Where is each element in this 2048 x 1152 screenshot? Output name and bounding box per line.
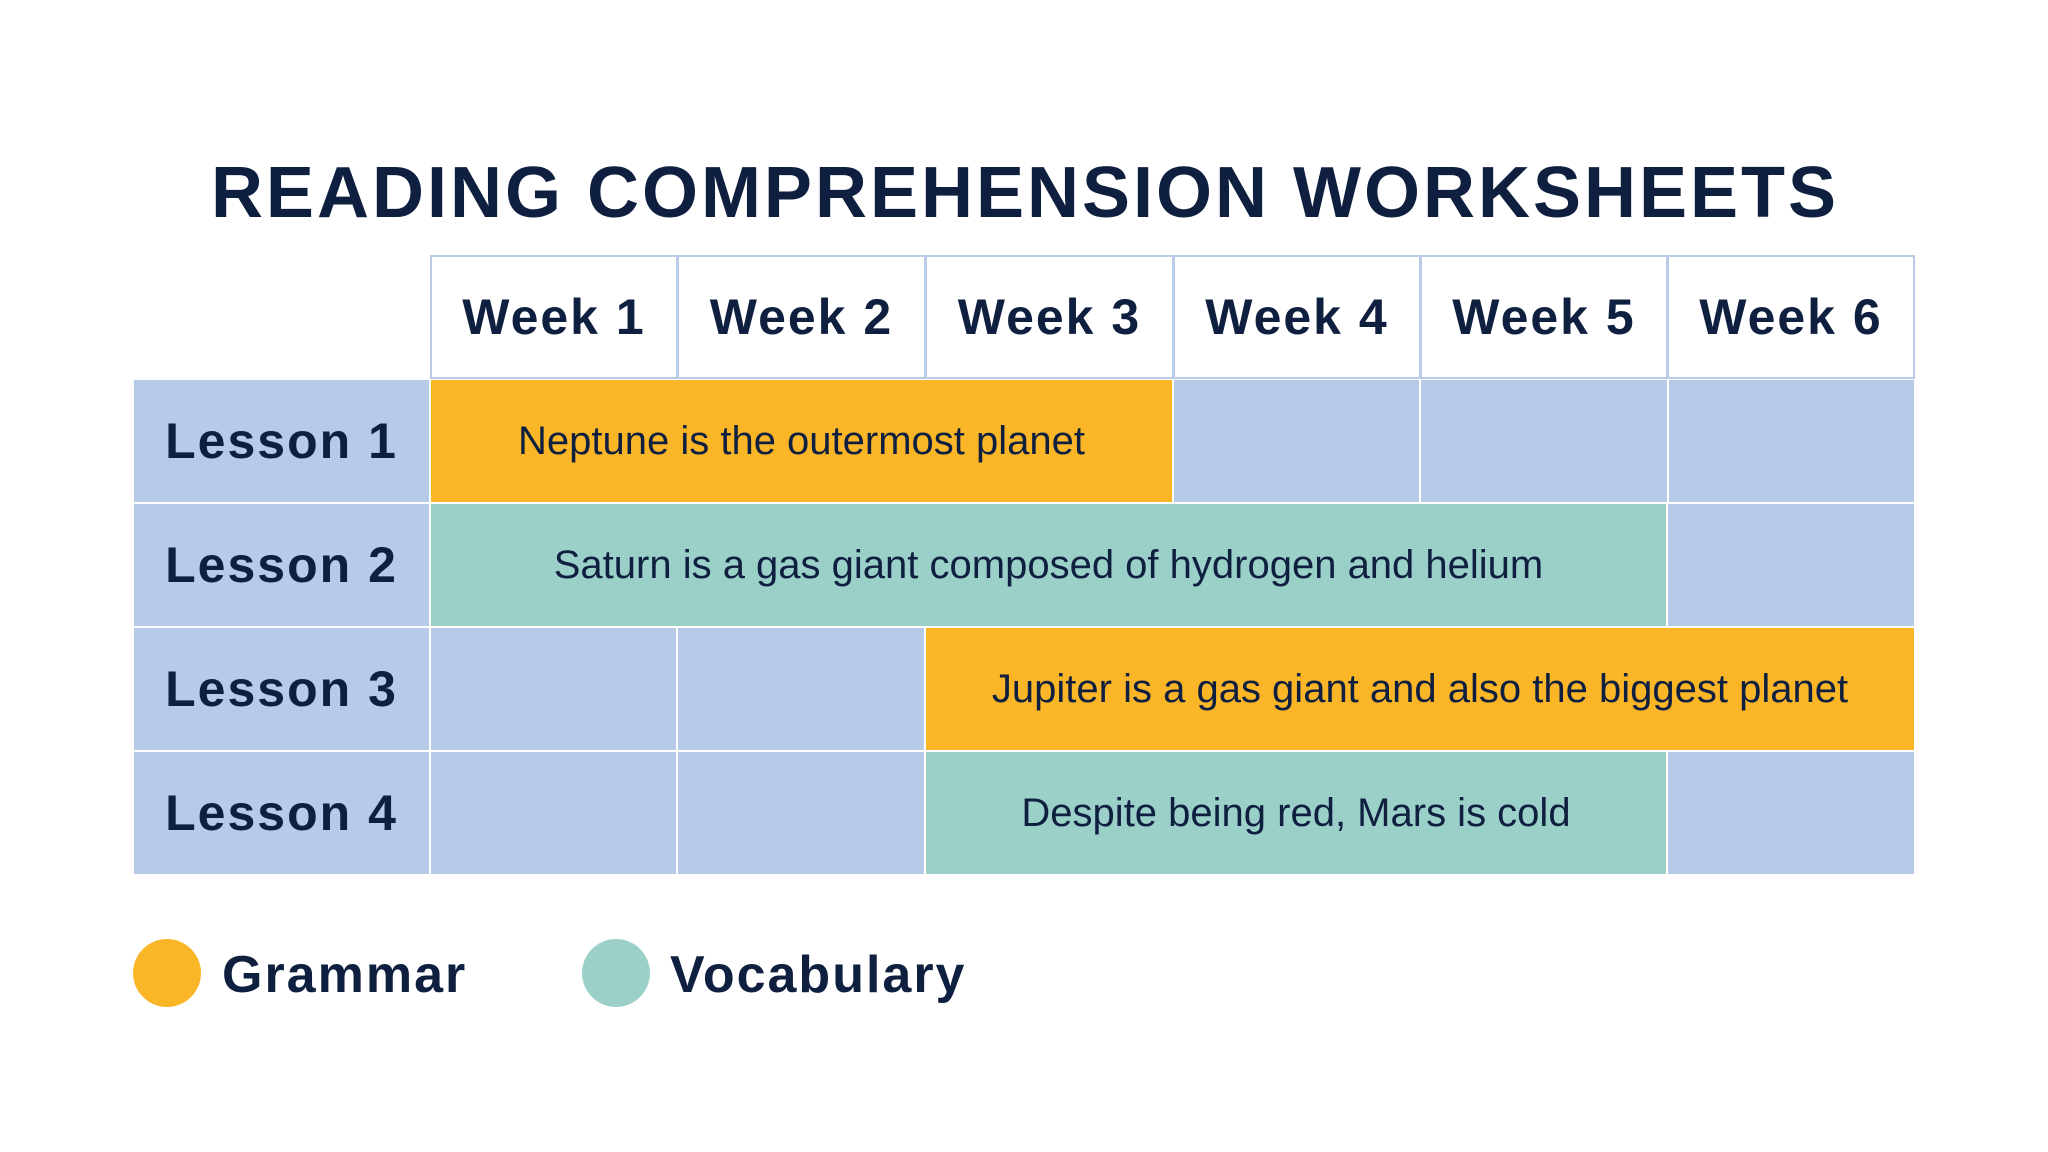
bar: Lesson 1 grammar: Neptune is the outermost planet — [518, 418, 1085, 462]
header: Week 4 — [1173, 255, 1421, 379]
empty cells row 3 — [431, 628, 924, 750]
header: Week 4: Week 4 — [1205, 289, 1389, 345]
header: Week 2 — [677, 255, 926, 379]
title: READING COMPREHENSION WORKSHEETS — [211, 153, 1839, 233]
bar: Lesson 3 grammar — [925, 627, 1915, 751]
row label: Lesson 2 — [133, 503, 430, 627]
row label: Lesson 1 — [133, 379, 430, 503]
header: Week 5: Week 5 — [1452, 289, 1636, 345]
bar: Lesson 4 vocabulary: Despite being red, Mars is cold — [1021, 790, 1571, 834]
legend — [133, 939, 966, 1007]
bar: Lesson 2 vocabulary: Saturn is a gas giant composed of hydrogen and helium — [554, 542, 1543, 586]
header: Week 1: Week 1 — [462, 289, 646, 345]
icon: vocabulary dot — [582, 939, 650, 1007]
empty cells row 1 — [1174, 380, 1914, 502]
legend label: Vocabulary: Vocabulary — [670, 946, 966, 1004]
header: Week 1 — [430, 255, 678, 379]
row label: Lesson 1: Lesson 1 — [165, 413, 398, 469]
schedule table — [134, 255, 1915, 874]
row label: Lesson 4: Lesson 4 — [165, 785, 398, 841]
header: Week 6: Week 6 — [1699, 289, 1883, 345]
empty cell row 4 end — [1667, 751, 1915, 875]
row label: Lesson 3 — [133, 627, 430, 751]
bar: Lesson 4 vocabulary — [925, 751, 1667, 875]
legend label: Grammar: Grammar — [222, 946, 467, 1004]
bar: Lesson 2 vocabulary — [430, 503, 1667, 627]
header: Week 6 — [1667, 255, 1915, 379]
header: Week 3: Week 3 — [958, 289, 1141, 345]
icon: grammar dot — [133, 939, 201, 1007]
header: Week 2: Week 2 — [710, 289, 893, 345]
row label: Lesson 3: Lesson 3 — [165, 661, 398, 717]
row label: Lesson 4 — [133, 751, 430, 875]
bar: Lesson 3 grammar: Jupiter is a gas giant and also the biggest planet — [992, 666, 1848, 710]
header: Week 3 — [925, 255, 1174, 379]
row label: Lesson 2: Lesson 2 — [165, 537, 398, 593]
header: Week 5 — [1420, 255, 1668, 379]
empty cell row 2 — [1667, 503, 1915, 627]
empty cells row 4 — [431, 752, 924, 874]
bar: Lesson 1 grammar — [430, 379, 1173, 503]
